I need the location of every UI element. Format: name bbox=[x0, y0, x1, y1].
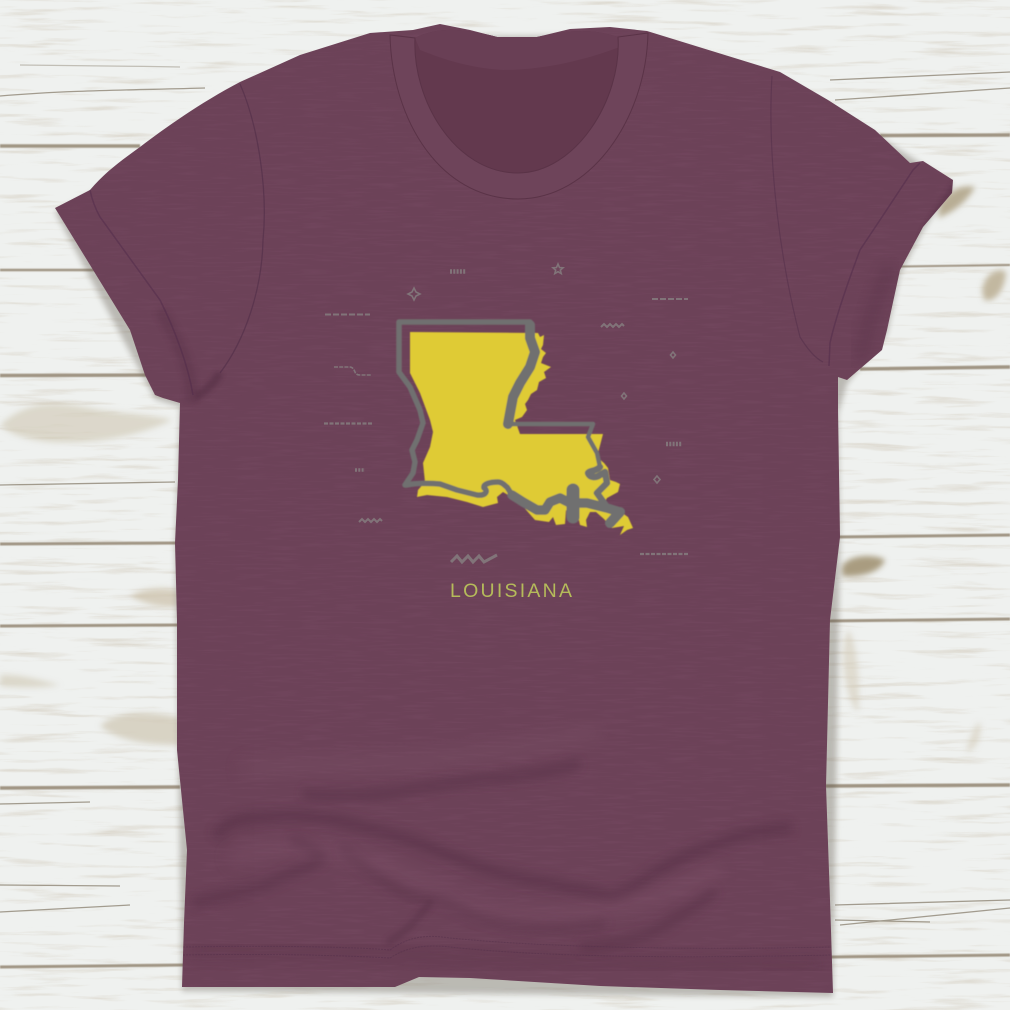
hem stitching bbox=[183, 936, 831, 950]
fabric folds and shading bbox=[90, 76, 953, 958]
Louisiana map bbox=[399, 322, 633, 535]
state name label: LOUISIANA bbox=[450, 580, 572, 602]
wood knots bbox=[0, 186, 1006, 752]
sleeve shading bbox=[167, 322, 192, 395]
back collar band bbox=[415, 30, 620, 70]
offset grey outline bbox=[399, 322, 620, 523]
decorative doodles bbox=[324, 264, 689, 562]
sleeve cuff edges bbox=[90, 190, 193, 395]
collar band bbox=[390, 33, 648, 199]
state fill bbox=[410, 332, 633, 535]
inside back of neck bbox=[415, 30, 618, 173]
sleeve seams bbox=[220, 84, 264, 373]
